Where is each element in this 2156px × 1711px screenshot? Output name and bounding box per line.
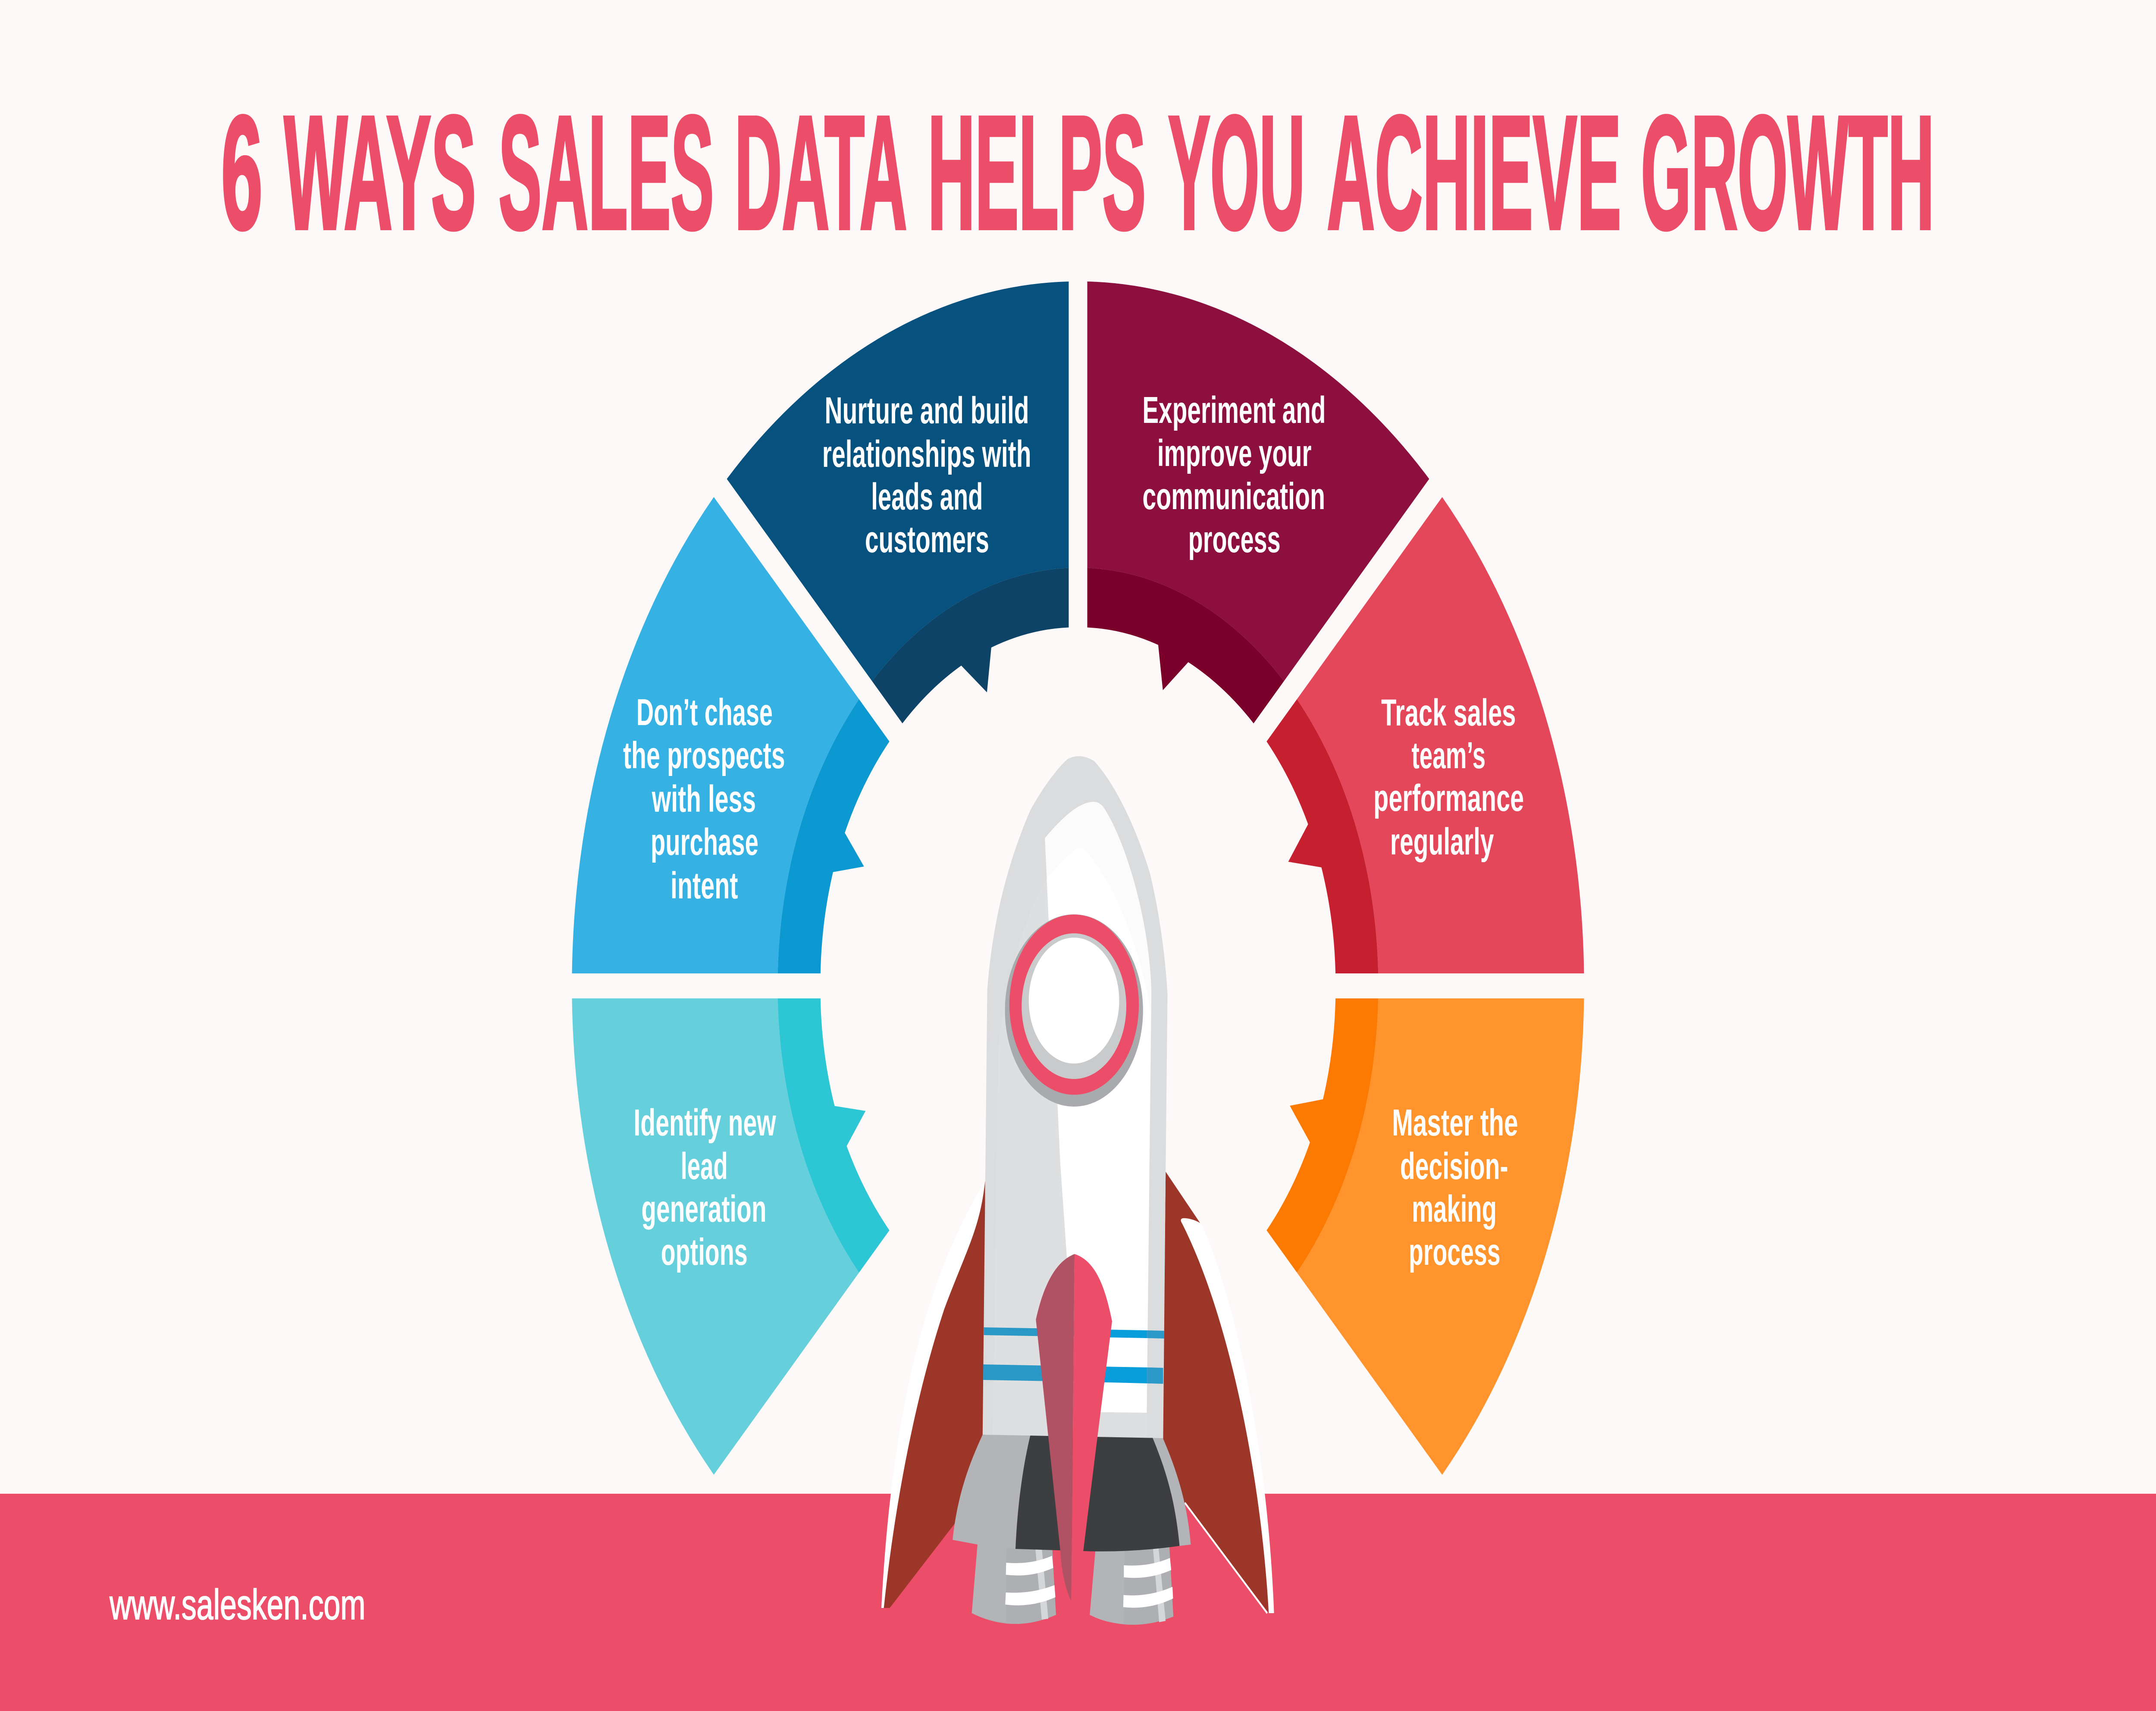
title: ACHIEVE bbox=[1327, 82, 1621, 263]
rocket porthole bbox=[1005, 914, 1143, 1107]
panel: identify new lead generation options: options bbox=[661, 1231, 748, 1273]
rocket blue stripes bbox=[983, 1327, 1164, 1384]
panel: nurture and build relationships: customers bbox=[865, 519, 989, 561]
panel: nurture and build relationships: leads and bbox=[871, 476, 983, 518]
panel: master the decision-making process: making bbox=[1412, 1188, 1497, 1230]
icon: rocket bbox=[881, 756, 1274, 1625]
website url: www.salesken.com bbox=[109, 1582, 365, 1629]
panel: identify new lead generation options: Identify new bbox=[633, 1102, 777, 1144]
panel: track sales team performance: regularly bbox=[1390, 821, 1494, 863]
rocket center fin bbox=[1036, 1254, 1112, 1601]
panel: don't chase low intent prospects: intent bbox=[671, 865, 738, 907]
title: GROWTH bbox=[1641, 82, 1934, 263]
rocket nozzle skirt bbox=[953, 1435, 1191, 1551]
panel: experiment and improve communication: improve your bbox=[1157, 432, 1312, 475]
panel: master the decision-making process: Master the bbox=[1392, 1102, 1518, 1144]
panel: don't chase low intent prospects: the prospects bbox=[623, 735, 785, 777]
panel: experiment and improve communication bbox=[1087, 282, 1429, 723]
panel: track sales team performance: performance bbox=[1373, 777, 1524, 820]
panel: track sales team performance: Track sales bbox=[1381, 692, 1516, 734]
title: YOU bbox=[1168, 82, 1305, 263]
panel: master the decision-making process: process bbox=[1409, 1231, 1501, 1273]
panel: nurture and build relationships: Nurture and build bbox=[825, 390, 1029, 432]
rocket left fin bbox=[881, 1181, 985, 1608]
title bbox=[221, 82, 1934, 263]
panel: don't chase low intent prospects: with less bbox=[652, 778, 756, 820]
title: 6 bbox=[221, 82, 263, 263]
panel: nurture and build relationships: relationships with bbox=[822, 433, 1031, 475]
panel: track sales team performance bbox=[1266, 497, 1584, 973]
panel: master the decision-making process bbox=[1266, 998, 1584, 1475]
panel: experiment and improve communication: Experiment and bbox=[1142, 389, 1326, 432]
title: DATA bbox=[735, 82, 907, 263]
panel: master the decision-making process: decision- bbox=[1400, 1145, 1508, 1188]
panel: don't chase low intent prospects bbox=[572, 497, 890, 973]
panel: track sales team performance: team’s bbox=[1411, 735, 1485, 777]
panel: experiment and improve communication: communication bbox=[1142, 475, 1325, 518]
rocket right leg bbox=[1090, 1545, 1173, 1625]
panel: experiment and improve communication: process bbox=[1188, 519, 1281, 561]
title: SALES bbox=[498, 82, 714, 263]
title: HELPS bbox=[928, 82, 1146, 263]
bottom band bbox=[0, 1494, 2156, 1711]
title: WAYS bbox=[284, 82, 476, 263]
rocket body bbox=[983, 756, 1168, 1438]
panel: don't chase low intent prospects: Don’t chase bbox=[636, 691, 773, 734]
rocket left leg bbox=[972, 1539, 1056, 1624]
panel: don't chase low intent prospects: purchase bbox=[651, 821, 758, 863]
rocket right fin bbox=[1163, 1172, 1274, 1613]
panel: identify new lead generation options bbox=[572, 998, 890, 1475]
panel: identify new lead generation options: lead bbox=[681, 1145, 728, 1188]
panel: identify new lead generation options: generation bbox=[641, 1188, 767, 1230]
panel: nurture and build relationships bbox=[727, 282, 1069, 723]
